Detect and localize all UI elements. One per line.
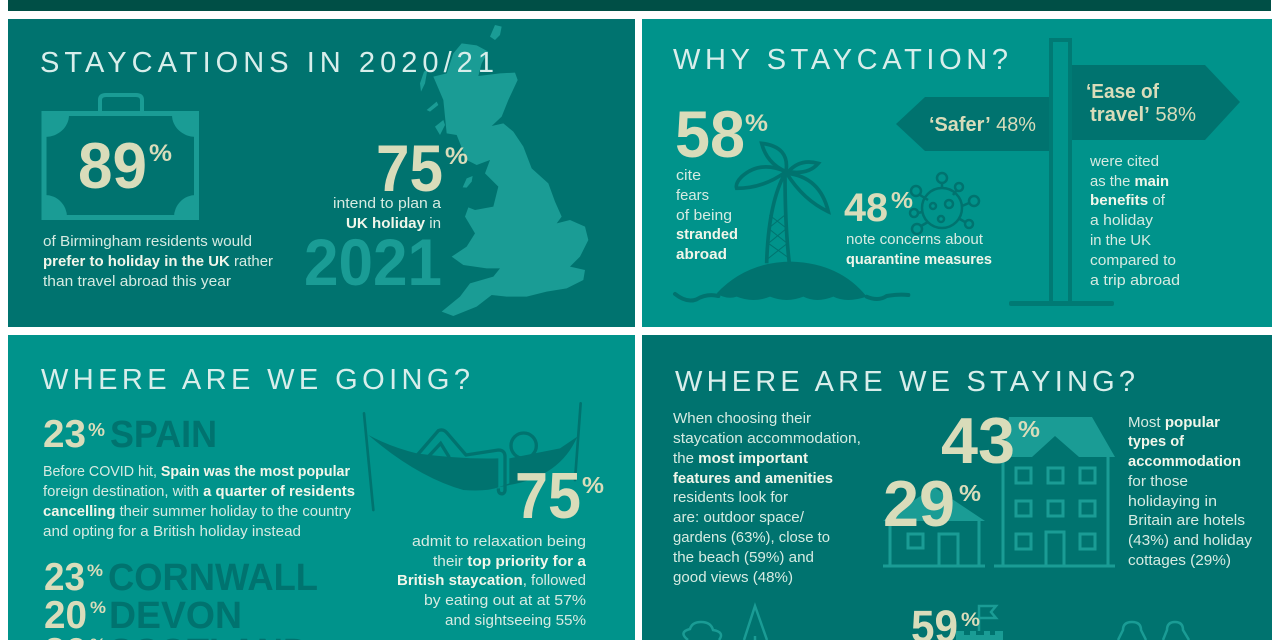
text: main benefits: as the main	[1090, 173, 1169, 190]
icon: sandcastle with flag	[956, 606, 1003, 640]
label: Ease of travel 58%	[1086, 81, 1196, 126]
icon: buckets	[1118, 622, 1189, 640]
stat: 75%: 75	[376, 131, 443, 205]
text: stranded abroad: fears	[676, 187, 709, 204]
heading: WHY STAYCATION?	[673, 44, 1012, 76]
text: stranded abroad: cite	[676, 167, 701, 184]
text: relaxation priority: their top priority for a	[433, 553, 587, 570]
text: popular accommodation: cottages (29%)	[1128, 552, 1231, 569]
panel: where are we going	[8, 335, 635, 640]
text: quarantine measures: note concerns about	[846, 231, 984, 248]
text: popular accommodation: holidaying in	[1128, 493, 1217, 510]
text: popular accommodation: Britain are hotels	[1128, 512, 1245, 529]
stat: 23% Cornwall: %	[87, 561, 103, 580]
icon: cottage	[883, 487, 985, 566]
text: intend to plan: UK holiday in	[346, 215, 441, 232]
text: relaxation priority: by eating out at at 57%	[424, 592, 586, 609]
icon: trees	[683, 606, 767, 640]
stat: 23% Spain: SPAIN	[110, 414, 217, 456]
stat: 29%: %	[959, 480, 981, 506]
heading: STAYCATIONS IN 2020/21	[40, 47, 498, 79]
text: features and amenities: gardens (63%), close to	[673, 529, 830, 546]
stat: 43%: %	[1018, 416, 1040, 442]
text: stranded abroad: stranded	[676, 226, 738, 243]
text: quarantine measures: quarantine measures	[846, 251, 992, 268]
panel: why staycation	[642, 19, 1272, 327]
label: Ease of travel 58%: travel’ 58%	[1090, 104, 1196, 126]
text: Spain most popular: foreign destination, with a quarter of residents	[43, 483, 355, 500]
text: popular accommodation	[1128, 414, 1252, 569]
stat: 20% Scotland	[44, 631, 309, 640]
stat: 23% Cornwall: CORNWALL	[108, 557, 318, 599]
text: main benefits: were cited	[1089, 153, 1159, 170]
text: features and amenities: features and amenities	[673, 470, 833, 487]
stat: 58%: 58	[675, 97, 745, 171]
text: prefer to holiday in the UK: of Birmingham residents would	[43, 233, 252, 250]
stat: 43%: 43	[941, 404, 1015, 477]
stat: 29%: 29	[883, 467, 955, 540]
panel: where are we staying	[642, 335, 1272, 640]
text: features and amenities: good views (48%)	[673, 569, 793, 586]
text: Spain most popular	[43, 463, 355, 540]
text: popular accommodation: Most popular	[1128, 414, 1220, 431]
icon: hotel	[994, 417, 1115, 566]
text: stranded abroad: abroad	[676, 246, 727, 263]
text: prefer to holiday in the UK: than travel abroad this year	[43, 273, 231, 290]
stat: 23% Spain	[43, 413, 217, 456]
icon: signpost	[896, 40, 1240, 306]
label: Ease of travel 58%: ‘Ease of	[1086, 81, 1159, 103]
top banner strip	[8, 0, 1271, 11]
text: features and amenities: the most important	[673, 450, 808, 467]
text: features and amenities	[673, 410, 861, 586]
stat: 48%: 48	[844, 186, 888, 230]
icon: palm tree island	[675, 143, 908, 301]
text: main benefits: compared to	[1090, 252, 1176, 269]
UK map	[420, 25, 588, 316]
text: popular accommodation: (43%) and holiday	[1128, 532, 1252, 549]
stat: 23% Spain: %	[88, 420, 105, 440]
stat: 48%: %	[891, 187, 913, 213]
text: relaxation priority	[397, 533, 587, 629]
text: prefer to holiday in the UK	[43, 233, 273, 290]
text: intend to plan	[333, 195, 442, 232]
stat: 20% Devon: %	[90, 598, 106, 617]
text: features and amenities: are: outdoor space/	[673, 509, 805, 526]
text: relaxation priority: British staycation, followed	[397, 572, 586, 589]
stat: 23% Cornwall: 23	[44, 556, 85, 599]
stat: 59%: %	[961, 610, 980, 631]
text: main benefits: in the UK	[1090, 232, 1151, 249]
stat: 75%: 75	[515, 459, 581, 532]
stat: 89%: 89	[78, 129, 147, 202]
text: main benefits: benefits of	[1090, 192, 1166, 209]
text: features and amenities: staycation accommodation,	[673, 430, 861, 447]
text: Spain most popular: Before COVID hit, Spain was the most popular	[43, 463, 350, 480]
stat: 20% Devon: DEVON	[109, 595, 242, 637]
text: Spain most popular: and opting for a British holiday instead	[43, 523, 301, 540]
text: intend to plan: intend to plan a	[333, 195, 442, 212]
stat: 20% Devon: 20	[44, 594, 87, 637]
label: Safer 48%: ‘Safer’ 48%	[929, 114, 1036, 136]
text: Spain most popular: cancelling their summer holiday to the country	[43, 503, 351, 520]
text: main benefits: a trip abroad	[1090, 272, 1180, 289]
heading: WHERE ARE WE STAYING?	[675, 366, 1139, 398]
icon: virus	[910, 173, 979, 234]
text: popular accommodation: for those	[1128, 473, 1188, 490]
stat: 20% Devon	[44, 594, 242, 637]
text: main benefits	[1089, 153, 1180, 289]
text: features and amenities: the beach (59%) and	[673, 549, 814, 566]
text: relaxation priority: admit to relaxation being	[412, 533, 586, 550]
text: relaxation priority: and sightseeing 55%	[445, 612, 586, 629]
text: prefer to holiday in the UK: prefer to holiday in the UK rather	[43, 253, 273, 270]
text: stranded abroad	[676, 167, 738, 263]
text: quarantine measures	[846, 231, 992, 268]
text: popular accommodation: accommodation	[1128, 453, 1241, 470]
text: features and amenities: residents look for	[673, 489, 788, 506]
heading: WHERE ARE WE GOING?	[41, 364, 474, 396]
stat: 48%	[844, 186, 913, 230]
icon: suitcase	[44, 95, 196, 218]
icon: hammock	[364, 403, 581, 510]
panel: staycations in 2020/21	[8, 19, 635, 327]
stat: 89%: %	[149, 140, 172, 167]
text: popular accommodation: types of	[1128, 433, 1185, 450]
text: main benefits: a holiday	[1090, 212, 1154, 229]
stat: 58%: %	[745, 110, 768, 137]
year: 2021: 2021	[304, 225, 442, 299]
stat: 75%: %	[445, 143, 468, 170]
text: features and amenities: When choosing their	[673, 410, 811, 427]
stat: 75%: %	[582, 472, 604, 498]
stat: 23% Spain: 23	[43, 413, 86, 456]
text: stranded abroad: of being	[676, 207, 732, 224]
